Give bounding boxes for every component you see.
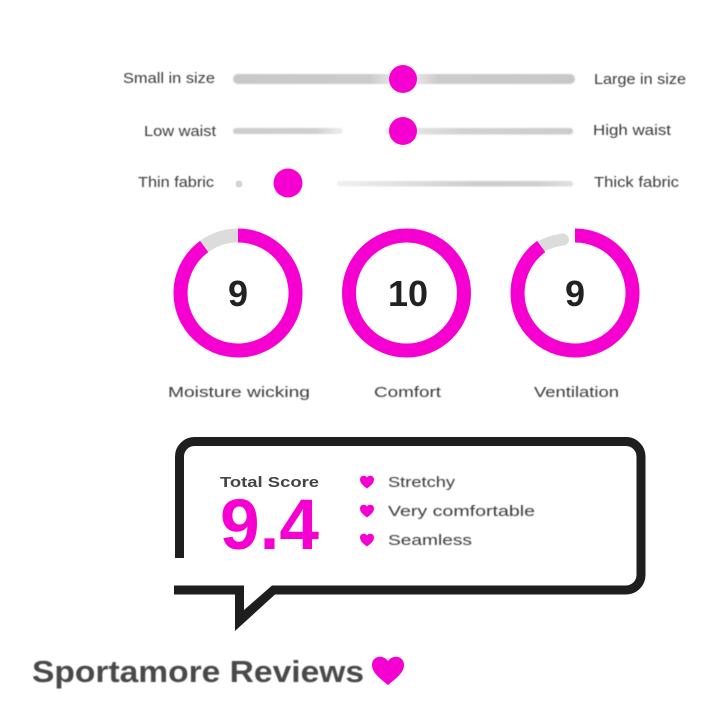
list item: seamless [360, 532, 472, 549]
icon: brand heart [372, 657, 404, 685]
track: fabric start dot [236, 180, 242, 188]
knob: fabric [274, 168, 302, 198]
ring remainder [204, 236, 238, 246]
score 9: 9 [565, 273, 585, 314]
text: stretchy: Stretchy [388, 474, 456, 491]
ring value [349, 236, 464, 350]
slider: fabric [138, 168, 680, 198]
speech bubble panel [174, 442, 641, 631]
label: small in size: Small in size [123, 70, 215, 87]
ring remainder [541, 240, 563, 246]
slider: size [123, 65, 686, 93]
label: comfort: Comfort [374, 384, 442, 401]
label: thick fabric: Thick fabric [594, 174, 680, 191]
score: 9.4: 9.4 [220, 486, 320, 565]
text: very comfortable: Very comfortable [388, 503, 535, 520]
bubble tail [174, 586, 280, 631]
label: large in size: Large in size [594, 71, 686, 88]
track: waist left [233, 128, 343, 134]
list item: very comfortable [360, 503, 535, 520]
score 9: 9 [228, 273, 248, 314]
ring chart: ventilation [518, 236, 633, 401]
label: moisture wicking: Moisture wicking [168, 384, 310, 401]
label: low waist: Low waist [144, 123, 217, 140]
ring value [518, 236, 633, 350]
list item: stretchy [360, 474, 456, 491]
bubble outline [180, 442, 641, 590]
text: seamless: Seamless [388, 532, 472, 549]
icon: heart [360, 505, 374, 518]
icon: heart [360, 534, 374, 546]
icon: heart [360, 476, 374, 488]
knob: size [389, 65, 417, 93]
ring value [181, 236, 296, 350]
ring chart: comfort [349, 236, 464, 401]
track: waist right [385, 128, 573, 134]
heading: total score: Total Score [220, 474, 319, 491]
score 10: 10 [388, 273, 428, 314]
track: size [233, 74, 575, 84]
label: thin fabric: Thin fabric [138, 174, 215, 191]
label: ventilation: Ventilation [534, 384, 619, 401]
slider: waist [144, 117, 672, 145]
knob: waist [389, 117, 417, 145]
track: fabric [337, 181, 573, 186]
ring chart: moisture wicking [168, 236, 310, 401]
brand footer [32, 654, 404, 689]
label: high waist: High waist [593, 122, 672, 139]
brand name: Sportamore Reviews [32, 654, 364, 689]
